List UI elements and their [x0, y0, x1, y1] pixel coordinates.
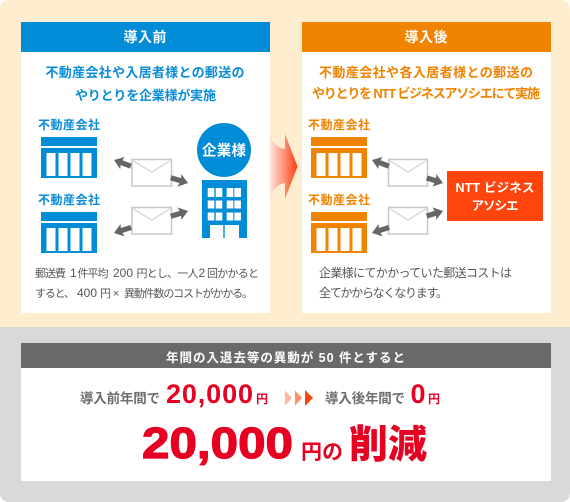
icon: client company badge: 企業様: [202, 142, 246, 160]
subheading: before: [46, 65, 244, 103]
subheading: after: やりとりを NTT ビジネスアソシエにて実施: [312, 86, 540, 101]
total savings: 円の: [301, 441, 343, 464]
text: before description: 件平均: [78, 266, 108, 280]
icon: envelope lower: [388, 208, 428, 234]
panel: annual savings: [0, 327, 570, 502]
icon: envelope upper: [132, 160, 172, 186]
subheading: before: 不動産会社や入居者様との郵送の: [46, 65, 244, 80]
arrow: upper right: [169, 172, 190, 189]
icon: real estate company 1: [308, 117, 370, 178]
icon: real estate company 2: [308, 192, 370, 253]
cost after: [325, 379, 440, 409]
heading: annual assumption: 年間の入退去等の異動が 50 件とすると: [166, 350, 405, 365]
text: before description: 円とし、一人: [136, 267, 198, 280]
text: before description: 郵送費: [35, 266, 66, 280]
cost before: 円: [256, 392, 268, 406]
text: after description: 全てかからなくなります。: [319, 286, 448, 300]
arrow: lower left: [112, 221, 133, 239]
arrow: lower right: [425, 205, 445, 222]
background: comparison area: [0, 0, 570, 327]
box: NTT Business Associe: NTT ビジネス: [456, 180, 534, 195]
panel: after introduction: [302, 22, 551, 313]
heading: after: [302, 22, 551, 52]
arrow: before to after: [270, 134, 298, 199]
panel: before introduction: [21, 22, 270, 313]
text: before description: 400: [77, 286, 97, 300]
box: NTT Business Associe: アソシエ: [472, 199, 518, 213]
icon: office building: [202, 180, 247, 238]
arrow: lower left: [370, 221, 391, 239]
icon: real estate company 1: 不動産会社: [308, 117, 370, 132]
icon: real estate company 2: 不動産会社: [38, 192, 100, 207]
cost before: [80, 379, 268, 409]
subheading: before: やりとりを企業様が実施: [75, 88, 216, 103]
text: before description: すると、: [35, 287, 75, 300]
text: before description: 円: [100, 288, 111, 300]
heading: before: [21, 22, 270, 52]
text: before description: 1: [70, 266, 77, 280]
total savings: 削減: [349, 424, 427, 467]
arrow: lower right: [169, 205, 190, 222]
text: before description: ×: [113, 288, 119, 300]
cost after: 円: [428, 392, 440, 406]
icon: real estate company 1: 不動産会社: [38, 117, 100, 132]
heading: annual assumption: [21, 343, 551, 368]
icon: real estate company 1: [38, 117, 100, 178]
text: before description: 2: [198, 266, 206, 280]
text: before description: [35, 266, 259, 300]
text: before description: 200: [113, 266, 133, 280]
cost before: 20,000: [166, 379, 253, 409]
icon: real estate company 2: [38, 192, 100, 253]
cost after: 0: [410, 379, 426, 409]
total savings: [142, 419, 427, 468]
icon: envelope lower: [132, 208, 172, 234]
arrow: upper left: [112, 154, 133, 172]
subheading: after: [312, 65, 540, 101]
cost after: 導入後年間で: [325, 390, 405, 406]
icon: triple arrows: [285, 390, 313, 406]
subheading: after: 不動産会社や各入居者様との郵送の: [319, 65, 533, 80]
text: after description: 企業様にてかかっていた郵送コストは: [319, 265, 512, 280]
arrow: upper right: [425, 172, 445, 189]
heading: after: 導入後: [404, 29, 448, 45]
text: before description: 回かかると: [207, 267, 259, 280]
cost before: 導入前年間で: [80, 390, 160, 406]
icon: client company badge: [197, 123, 251, 177]
text: before description: 異動件数のコストがかかる。: [124, 286, 253, 300]
arrow: upper left: [370, 154, 391, 172]
box: NTT Business Associe: [447, 171, 543, 221]
total savings: 20,000: [142, 419, 293, 468]
icon: envelope upper: [388, 160, 428, 186]
text: after description: [319, 265, 512, 300]
heading: before: 導入前: [124, 29, 166, 45]
icon: real estate company 2: 不動産会社: [308, 192, 370, 207]
